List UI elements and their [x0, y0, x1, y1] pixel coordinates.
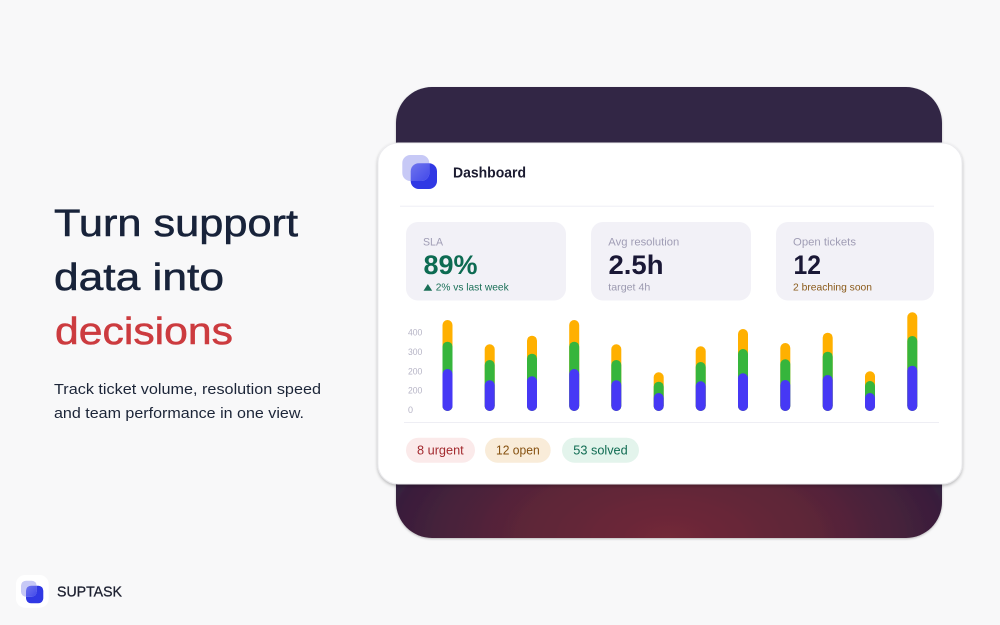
stat: open tickets: Open tickets [793, 236, 857, 248]
stat: SLA [406, 222, 566, 300]
y axis labels: 300 [408, 347, 422, 357]
stat: SLA: SLA [423, 236, 444, 248]
pill: 8 urgent [406, 438, 475, 463]
pill: 12 open [485, 438, 551, 463]
pill: 8 urgent: 8 urgent [417, 442, 464, 457]
heading: Turn support data into decisions: decisions [55, 311, 233, 353]
stacked bar chart [442, 312, 917, 411]
subheading text: and team performance in one view. [54, 405, 304, 422]
heading: Turn support data into decisions: data into [54, 257, 224, 299]
stat: average resolution [591, 222, 751, 300]
brand: Suptask logo and wordmark [21, 580, 122, 604]
heading: Turn support data into decisions: Turn support [54, 203, 299, 245]
stat: open tickets [776, 222, 934, 300]
stat: open tickets: 2 breaching soon [793, 282, 872, 294]
stat: SLA: 2% vs last week [436, 282, 509, 294]
y axis labels [408, 328, 422, 415]
icon: dashboard logo [402, 155, 437, 189]
pill: 12 open: 12 open [496, 442, 540, 457]
y axis labels: 0 [408, 405, 413, 415]
pill: 53 solved [562, 438, 639, 463]
stat: average resolution: target 4h [608, 282, 650, 294]
stat: open tickets: 12 [794, 250, 821, 280]
pill: 53 solved: 53 solved [573, 442, 628, 457]
stat: average resolution: Avg resolution [608, 236, 679, 248]
brand: Suptask logo and wordmark: SUPTASK [57, 584, 122, 601]
y axis labels: 200 [408, 386, 422, 396]
y axis labels: 400 [408, 328, 422, 338]
subheading text: Track ticket volume, resolution speed [54, 381, 321, 398]
heading: Turn support data into decisions [54, 203, 299, 353]
panel: dashboard card [378, 143, 962, 484]
stat: average resolution: 2.5h [608, 250, 664, 280]
dark backdrop panel [396, 87, 942, 538]
card title: Dashboard [453, 166, 526, 182]
stat: SLA: 89% [424, 250, 478, 280]
subheading text [54, 381, 321, 422]
y axis labels: 200 [408, 366, 422, 376]
